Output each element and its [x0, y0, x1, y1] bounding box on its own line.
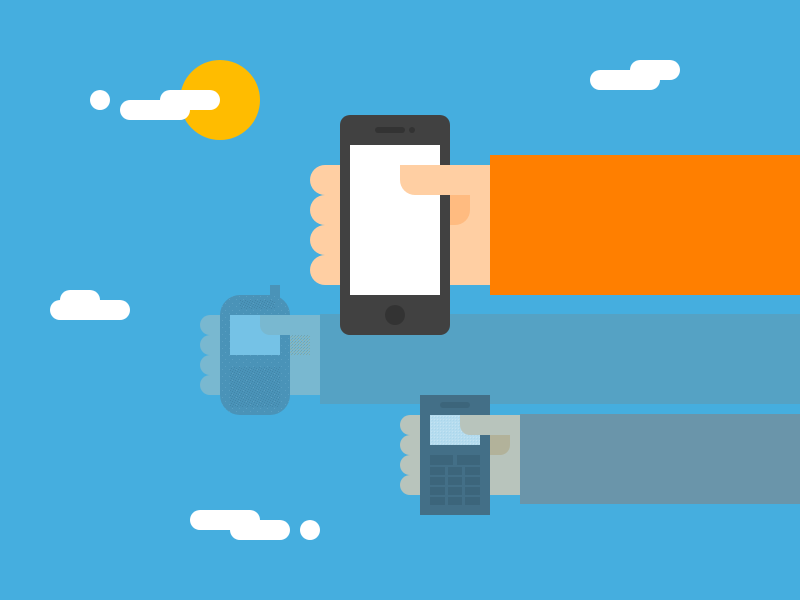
keypad phone screen	[430, 415, 480, 445]
smartphone camera	[409, 127, 415, 133]
keypad phone speaker	[440, 402, 470, 408]
orange sleeve	[490, 155, 800, 295]
sun	[180, 60, 260, 140]
main thumb shadow	[450, 195, 470, 225]
keypad phone body	[420, 395, 490, 515]
main thumb	[400, 165, 490, 195]
keypad hand thumb	[460, 415, 520, 435]
keypad phone keys	[430, 455, 480, 505]
ghost sleeve	[320, 314, 800, 404]
main hand holding smartphone	[310, 115, 800, 335]
cloud: top left with dot	[90, 90, 220, 120]
brick phone body	[220, 295, 290, 415]
smartphone body	[340, 115, 450, 335]
keypad hand palm and fingers	[400, 415, 520, 495]
main hand palm and fingers	[310, 165, 490, 285]
cloud: top right	[590, 60, 680, 90]
second hand holding keypad phone	[400, 395, 800, 515]
cloud: bottom with dot	[190, 510, 320, 540]
brick phone dithered keypad	[230, 367, 280, 407]
brick phone antenna	[270, 285, 280, 300]
keypad hand thumb shadow	[490, 435, 510, 455]
ghost hand holding old brick phone	[200, 285, 800, 415]
brick phone screen	[230, 315, 280, 355]
ghost hand palm and fingers	[200, 315, 320, 395]
ghost thumb shadow	[290, 335, 310, 355]
smartphone home button	[385, 305, 405, 325]
ghost thumb	[260, 315, 320, 335]
cloud: middle left	[50, 290, 130, 320]
smartphone screen	[350, 145, 440, 295]
keypad hand sleeve	[520, 414, 800, 504]
smartphone speaker	[375, 127, 405, 133]
